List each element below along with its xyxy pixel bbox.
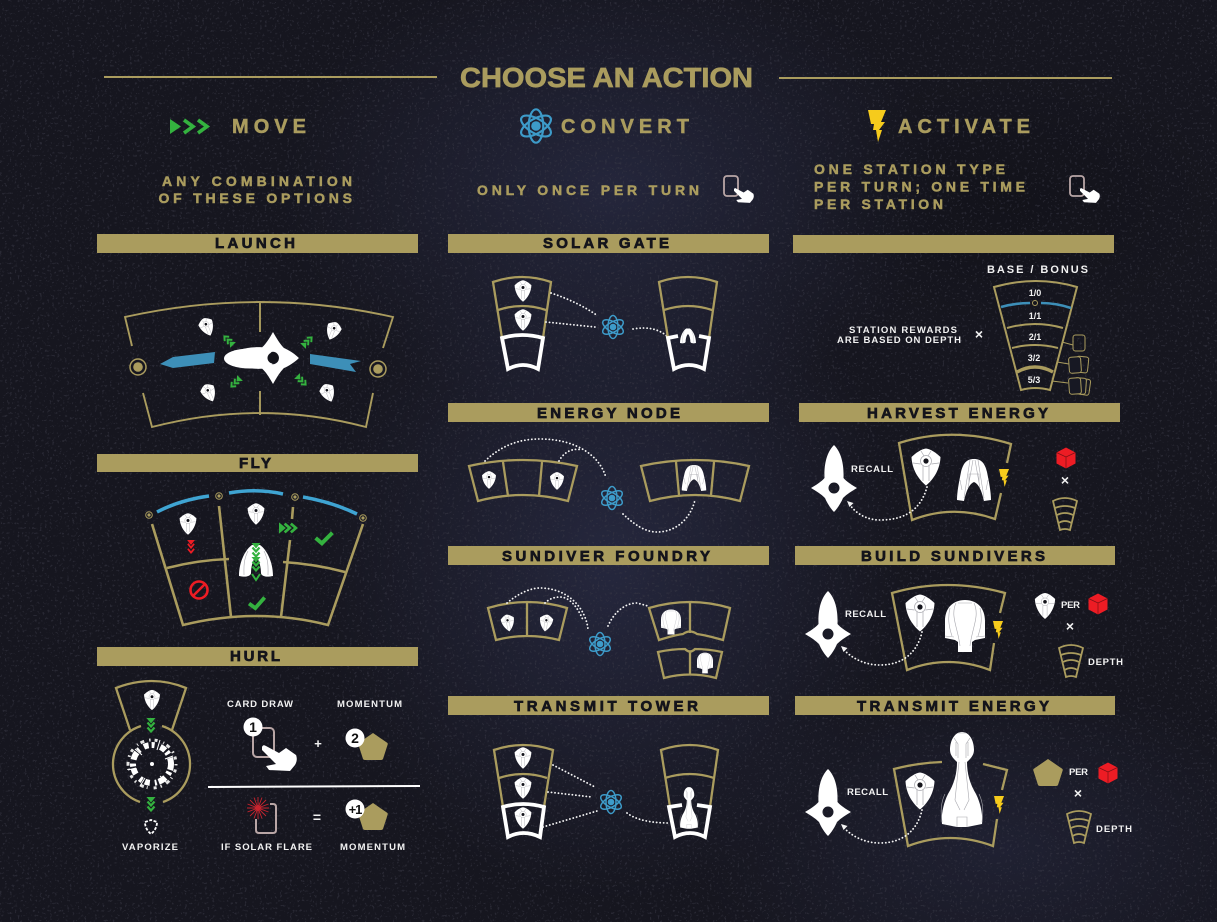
momentum (314, 699, 402, 760)
transmit tower conversion (543, 765, 670, 827)
heading: move: MOVE (232, 116, 306, 138)
heading: convert (518, 109, 689, 143)
recall (811, 445, 893, 512)
black hole diagram (113, 681, 190, 853)
panel: hurl (97, 647, 420, 853)
depth chart: 3/2 (1028, 353, 1040, 363)
depth chart: 2/1 (1029, 332, 1041, 342)
note: activate (814, 161, 1100, 212)
heading: activate (868, 110, 1030, 142)
build formula (1035, 593, 1123, 677)
panel: launch (97, 234, 418, 427)
panel: station rewards: ARE BASED ON DEPTH (837, 335, 961, 346)
panel: transmit energy: TRANSMIT ENERGY (857, 698, 1049, 715)
recall: RECALL (851, 464, 893, 475)
solar gate conversion (546, 293, 668, 338)
momentum: 2 (351, 730, 359, 746)
panel: fly (97, 454, 418, 625)
transmit formula (1033, 759, 1132, 843)
transmit formula: × (1074, 785, 1082, 801)
momentum bonus: +1 (349, 802, 362, 817)
transmit tower after (661, 745, 718, 837)
panel: hurl: HURL (230, 648, 280, 665)
note: move: ANY COMBINATION (162, 173, 352, 189)
panel: station rewards (793, 235, 1114, 396)
card draw (227, 699, 297, 771)
solar flare bonus (221, 797, 312, 853)
recall: RECALL (847, 787, 888, 798)
note: move (158, 173, 352, 206)
depth chart: 1/0 (1029, 288, 1041, 298)
foundry conversion (507, 588, 648, 656)
momentum: MOMENTUM (337, 699, 402, 710)
title: CHOOSE AN ACTION (460, 62, 753, 93)
harvest station (847, 435, 1011, 520)
panel: energy node: ENERGY NODE (537, 405, 680, 422)
depth chart: 5/3 (1028, 375, 1040, 385)
transmit formula: DEPTH (1096, 824, 1132, 835)
momentum: + (314, 736, 322, 751)
foundry before (488, 602, 567, 640)
build station (841, 585, 1005, 670)
panel: build sundivers: BUILD SUNDIVERS (861, 548, 1045, 565)
panel: solar gate (448, 234, 769, 369)
harvest formula (1053, 448, 1077, 530)
note: activate: PER TURN; ONE TIME (814, 178, 1025, 194)
fly diagram (145, 491, 367, 625)
black hole diagram: VAPORIZE (122, 842, 178, 853)
transmit tower before (494, 745, 553, 837)
transmit formula: PER (1069, 767, 1088, 778)
card draw: 1 (249, 719, 257, 735)
recall (805, 591, 886, 658)
energy node conversion (485, 439, 695, 532)
panel: station rewards: BASE / BONUS (987, 264, 1088, 276)
solar flare bonus: IF SOLAR FLARE (221, 842, 312, 853)
panel: launch: LAUNCH (215, 235, 295, 252)
build formula: × (1066, 618, 1074, 634)
heading: move (170, 116, 306, 138)
panel: energy node (448, 403, 769, 532)
momentum bonus: = (313, 809, 321, 825)
energy node after (641, 460, 749, 501)
energy node before (469, 460, 577, 501)
solar gate before (493, 277, 551, 369)
panel: harvest energy: HARVEST ENERGY (867, 405, 1048, 422)
note: convert: ONLY ONCE PER TURN (477, 182, 699, 198)
panel: fly: FLY (239, 455, 271, 472)
recall: RECALL (845, 609, 886, 620)
recall (805, 769, 888, 836)
panel: station rewards: STATION REWARDS (849, 325, 957, 336)
foundry after (649, 602, 730, 678)
note: convert (477, 176, 754, 203)
momentum bonus (313, 800, 405, 853)
build formula: PER (1061, 600, 1080, 611)
panel: harvest energy (799, 403, 1120, 530)
harvest formula: × (1061, 472, 1069, 488)
heading: convert: CONVERT (561, 116, 689, 138)
note: activate: ONE STATION TYPE (814, 161, 1005, 177)
panel: solar gate: SOLAR GATE (543, 235, 669, 252)
momentum bonus: MOMENTUM (340, 842, 405, 853)
panel: sundiver foundry: SUNDIVER FOUNDRY (502, 548, 710, 565)
build formula: DEPTH (1088, 657, 1123, 668)
depth chart (994, 281, 1077, 390)
note: activate: PER STATION (814, 196, 943, 212)
heading: activate: ACTIVATE (898, 116, 1030, 138)
launch diagram (125, 302, 393, 427)
panel: transmit energy (795, 696, 1132, 846)
bonus cards (1052, 335, 1091, 396)
solar gate after (659, 277, 717, 369)
panel: build sundivers (795, 546, 1123, 677)
panel: sundiver foundry (448, 546, 769, 678)
transmit station (841, 732, 1007, 846)
panel: transmit tower (448, 696, 769, 837)
panel: transmit tower: TRANSMIT TOWER (514, 698, 698, 715)
note: move: OF THESE OPTIONS (158, 190, 352, 206)
panel: station rewards: × (975, 326, 983, 342)
depth chart: 1/1 (1029, 311, 1041, 321)
card draw: CARD DRAW (227, 699, 293, 710)
